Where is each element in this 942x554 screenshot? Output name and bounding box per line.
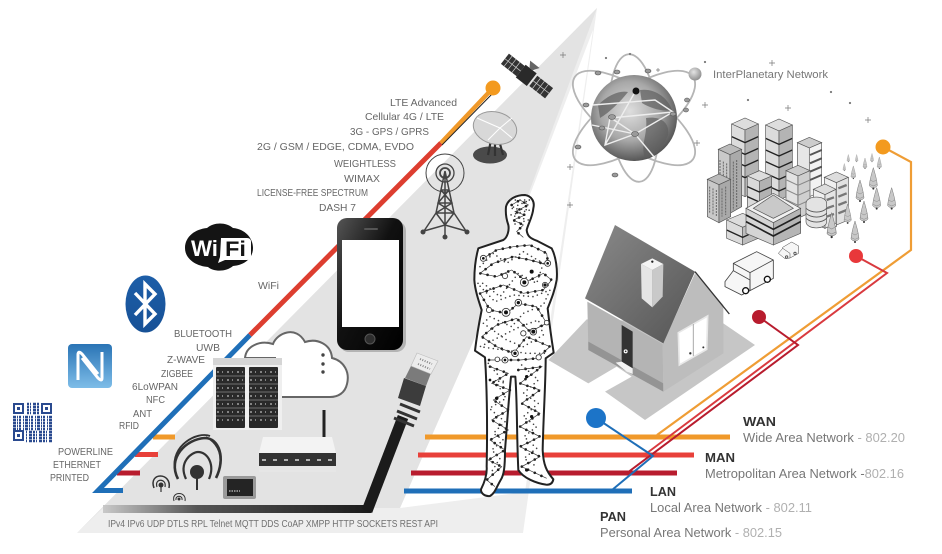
text: short range protocols: PRINTED <box>50 472 89 484</box>
legend: PAN <box>600 510 782 540</box>
legend: LAN: LAN <box>650 485 676 499</box>
icon: Bluetooth logo <box>126 276 166 332</box>
text: application protocols: IPv4 IPv6 UDP DTLS RPL Telnet MQTT DDS CoAP XMPP HTTP SOCKETS REST API <box>108 519 438 530</box>
icon: NFC logo <box>68 344 112 388</box>
text: short range protocols: UWB <box>196 342 220 354</box>
legend: WAN: WAN <box>743 415 776 429</box>
icon: signal sensors <box>153 435 221 501</box>
icon: communication tower <box>420 154 470 240</box>
icon: server rack <box>213 358 282 430</box>
legend: WAN <box>743 415 905 445</box>
text: cellular protocols: 3G - GPS / GPRS <box>350 126 429 138</box>
icon: WiFi logo: Fi <box>225 238 246 261</box>
legend: PAN: PAN <box>600 510 626 524</box>
text: cellular protocols: DASH 7 <box>319 202 356 214</box>
node: WAN dot <box>876 140 890 154</box>
text: cellular protocols: WiFi <box>258 280 279 292</box>
icon: QR code <box>13 404 52 441</box>
icon: globe with orbits <box>559 52 709 184</box>
legend: LAN <box>650 485 812 515</box>
node: LAN dot <box>752 310 766 324</box>
illustration: city <box>707 118 896 245</box>
illustration: man made of network nodes <box>474 195 557 496</box>
legend: MAN: Metropolitan Area Network -802.16 <box>705 466 904 481</box>
text: short range protocols: NFC <box>146 394 165 406</box>
legend: MAN <box>705 451 904 481</box>
text: short range protocols: ZIGBEE <box>161 368 193 380</box>
text: interplanetary label: InterPlanetary Network <box>713 69 829 81</box>
text: short range protocols: RFID <box>119 420 139 432</box>
icon: WiFi logo <box>185 224 253 271</box>
text: cellular protocols: 2G / GSM / EDGE, CDMA, EVDO <box>257 141 414 153</box>
text: short range protocols: ANT <box>133 408 153 420</box>
text: short range protocols: POWERLINE <box>58 446 113 458</box>
illustration: house <box>548 225 755 420</box>
text: short range protocols <box>50 328 232 484</box>
icon: cloud dots <box>321 353 325 374</box>
legend: WAN: Wide Area Network - 802.20 <box>743 430 905 445</box>
chart: protocol range lines on the left <box>98 80 500 490</box>
icon: ethernet cable <box>103 353 438 513</box>
icon: chip module <box>223 476 256 499</box>
text: cellular protocols: Cellular 4G / LTE <box>365 111 444 123</box>
arrows: connectors from nodes to bars <box>596 147 911 490</box>
text: cellular protocols <box>257 97 457 292</box>
legend: LAN: Local Area Network - 802.11 <box>650 500 812 515</box>
decoration: stars <box>560 52 871 208</box>
node: MAN dot <box>849 249 863 263</box>
icon: WiFi logo: Wi <box>191 236 218 261</box>
text: short range protocols: ETHERNET <box>53 459 101 471</box>
icon: satellite <box>500 48 558 100</box>
icon: smartphone <box>337 218 406 352</box>
icon: wireless router <box>259 410 336 472</box>
illustration: delivery trucks <box>725 242 799 295</box>
text: short range protocols: Z-WAVE <box>167 354 205 366</box>
node: PAN dot <box>586 408 606 428</box>
icon: cloud <box>245 332 348 397</box>
legend: MAN: MAN <box>705 451 735 465</box>
icon: interplanetary planet <box>688 68 702 80</box>
legend: PAN: Personal Area Network - 802.15 <box>600 525 782 540</box>
text: short range protocols: 6LoWPAN <box>132 381 178 393</box>
icon: satellite dish <box>470 107 520 164</box>
text: cellular protocols: LTE Advanced <box>390 97 457 109</box>
panel: grey perspective wedge <box>77 8 597 533</box>
text: cellular protocols: WIMAX <box>344 173 380 185</box>
text: short range protocols: BLUETOOTH <box>174 328 232 340</box>
text: cellular protocols: LICENSE-FREE SPECTRUM <box>257 187 368 199</box>
text: cellular protocols: WEIGHTLESS <box>334 158 396 170</box>
chart: network range bars <box>404 434 730 494</box>
